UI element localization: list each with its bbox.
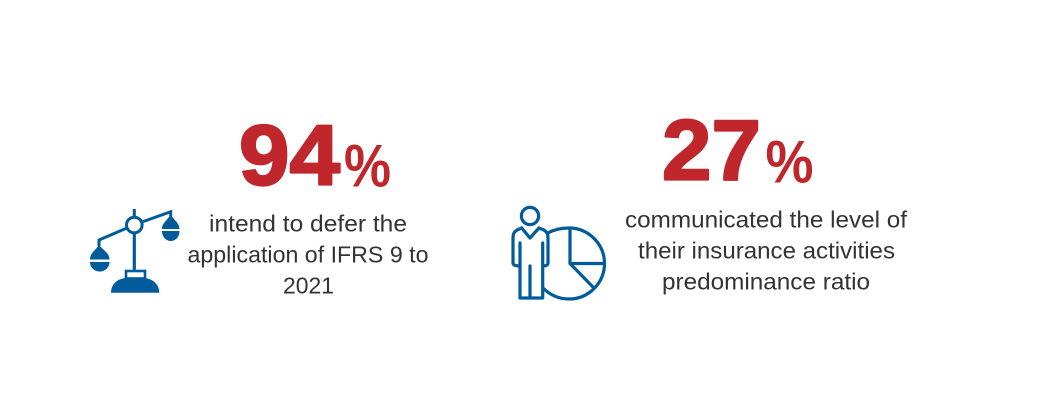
stat: 94 percent: % [344,132,391,200]
text: defer IFRS 9: 2021 [283,272,334,298]
text: predominance ratio [625,206,908,294]
stat: 27 percent: % [766,128,814,196]
text: predominance ratio: predominance ratio [662,268,870,294]
icon: balance scale [90,209,180,293]
stat: 94 percent: 94 [239,108,340,204]
text: predominance ratio: communicated the level of [625,206,908,232]
icon: person with pie chart [513,207,604,299]
stat: 27 percent [662,104,814,198]
text: defer IFRS 9 [188,210,428,298]
text: defer IFRS 9: application of IFRS 9 to [188,242,428,268]
stat: 94 percent [239,108,391,204]
text: predominance ratio: their insurance activities [638,238,895,264]
stat: 27 percent: 27 [662,104,761,198]
text: defer IFRS 9: intend to defer the [209,210,407,236]
